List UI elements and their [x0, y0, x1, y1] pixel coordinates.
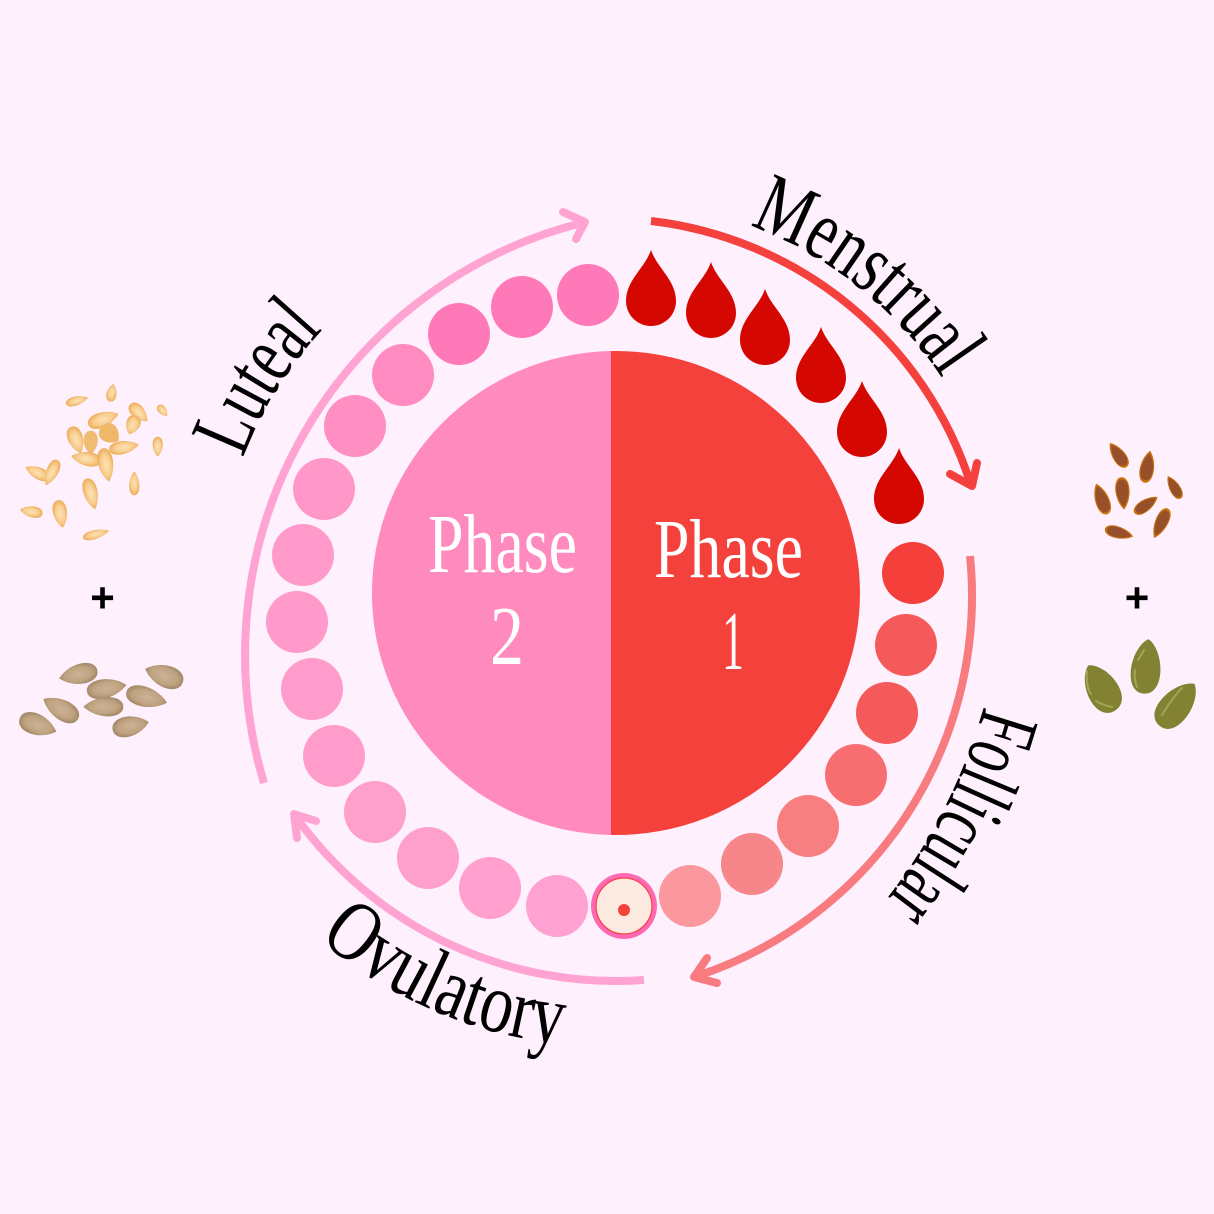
central circle: phases: [372, 351, 860, 835]
icon: sunflower seeds: [16, 658, 187, 742]
label: Menstrual: Menstrual: [751, 174, 988, 378]
icon: sesame seeds: [19, 383, 170, 542]
icon: ovum: [591, 873, 657, 939]
plus sign right: +: [1125, 574, 1149, 621]
follicular day dots: [659, 542, 944, 927]
label: Ovulatory: Ovulatory: [329, 904, 567, 1060]
heading: Phase 1: Phase: [654, 503, 803, 596]
heading: Phase 2: Phase: [428, 498, 577, 591]
panel: phase 2 half: [372, 351, 611, 835]
number: 1: 1: [722, 595, 744, 688]
menstrual blood drops: [626, 250, 924, 524]
plus sign left: +: [90, 574, 115, 621]
arrow: menstrual: [651, 221, 977, 486]
number: 2: 2: [490, 590, 524, 683]
arrow: ovulatory: [294, 814, 644, 981]
label: Luteal: Luteal: [192, 294, 322, 456]
panel: phase 1 half: [611, 351, 860, 835]
arrow: luteal: [245, 212, 585, 783]
icon: pumpkin seeds: [1075, 638, 1206, 736]
luteal and ovulatory day dots: [266, 264, 619, 937]
arrow: follicular: [694, 556, 972, 983]
icon: flax seeds: [1090, 440, 1185, 542]
label: Follicular: Follicular: [888, 708, 1038, 926]
